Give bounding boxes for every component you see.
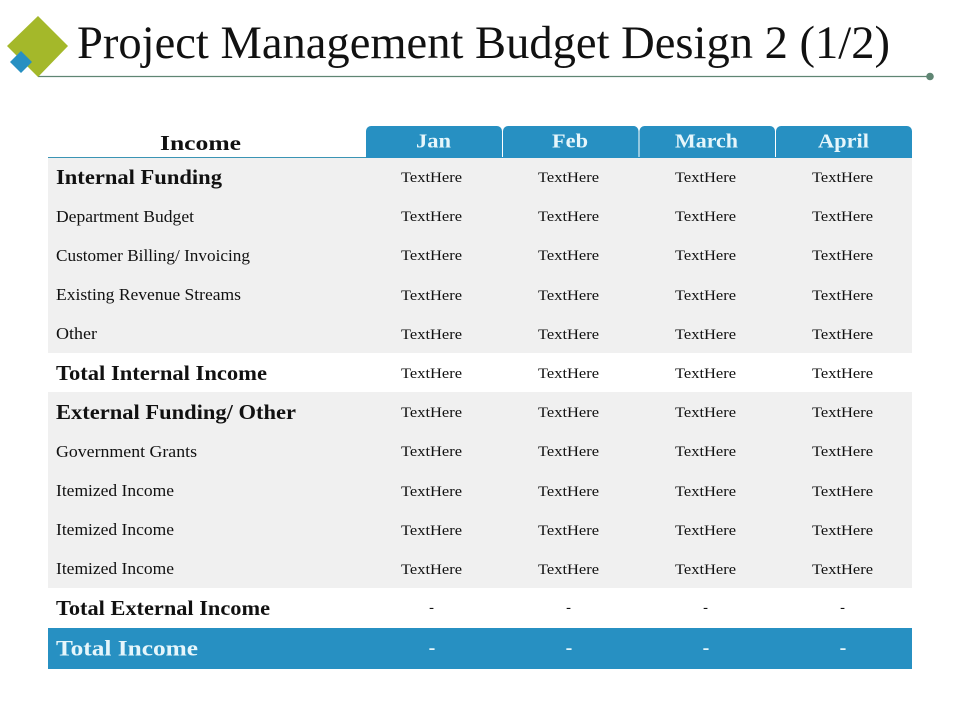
- row: Customer Billing/ Invoicing: TextHere: [675, 248, 736, 264]
- row: Other: [56, 324, 873, 343]
- row: Itemized Income 3: TextHere: [538, 562, 599, 578]
- row: Itemized Income 3: Itemized Income: [56, 559, 174, 578]
- row: External Funding/ Other: TextHere: [675, 405, 736, 421]
- row: Itemized Income 2: TextHere: [675, 523, 736, 539]
- row: Total Internal Income: TextHere: [401, 366, 462, 382]
- row: Internal Funding: TextHere: [401, 170, 462, 186]
- row: Existing Revenue Streams: TextHere: [675, 288, 736, 304]
- row: Total Internal Income: [56, 361, 873, 385]
- row: Customer Billing/ Invoicing: TextHere: [538, 248, 599, 264]
- title: Project Management Budget Design 2 (1/2): [77, 17, 890, 69]
- row: Total Income: -: [703, 637, 709, 659]
- row: Itemized Income 1: [56, 481, 873, 500]
- row: Other: TextHere: [812, 327, 873, 343]
- row: Itemized Income 1: TextHere: [812, 484, 873, 500]
- row: Other: TextHere: [401, 327, 462, 343]
- row: Total Income: -: [840, 637, 846, 659]
- row: Existing Revenue Streams: TextHere: [538, 288, 599, 304]
- panel: external funding background: [48, 392, 912, 588]
- row: Itemized Income 2: Itemized Income: [56, 520, 174, 539]
- row: Total Internal Income: Total Internal Income: [56, 361, 267, 385]
- row: Existing Revenue Streams: Existing Revenue Streams: [56, 285, 241, 304]
- row: Customer Billing/ Invoicing: TextHere: [401, 248, 462, 264]
- total income band: [48, 628, 912, 669]
- row: External Funding/ Other: TextHere: [538, 405, 599, 421]
- row: Total Internal Income: TextHere: [675, 366, 736, 382]
- row: Internal Funding: TextHere: [538, 170, 599, 186]
- row: Itemized Income 2: TextHere: [812, 523, 873, 539]
- row: External Funding/ Other: External Funding/ Other: [56, 400, 296, 424]
- row: Other: TextHere: [538, 327, 599, 343]
- row: External Funding/ Other: TextHere: [401, 405, 462, 421]
- row: Internal Funding: TextHere: [675, 170, 736, 186]
- row: Total Income: Total Income: [56, 636, 198, 660]
- row: Itemized Income 1: TextHere: [538, 484, 599, 500]
- row: Government Grants: TextHere: [812, 444, 873, 460]
- row: Customer Billing/ Invoicing: TextHere: [812, 248, 873, 264]
- row: Department Budget: TextHere: [675, 209, 736, 225]
- row: Government Grants: TextHere: [401, 444, 462, 460]
- row: Customer Billing/ Invoicing: [56, 246, 873, 265]
- row: Total Income: -: [566, 637, 572, 659]
- row: Itemized Income 3: TextHere: [675, 562, 736, 578]
- row: Total External Income: -: [429, 600, 434, 616]
- icon: green and blue diamonds: [7, 16, 68, 77]
- header rule with end dot: [38, 73, 934, 80]
- row: Department Budget: [56, 207, 873, 226]
- row: Department Budget: TextHere: [401, 209, 462, 225]
- row: Itemized Income 2: [56, 520, 873, 539]
- row: Itemized Income 1: TextHere: [401, 484, 462, 500]
- row: Department Budget: Department Budget: [56, 207, 194, 226]
- row: Internal Funding: TextHere: [812, 170, 873, 186]
- row: Itemized Income 1: TextHere: [675, 484, 736, 500]
- month header tabs: [366, 126, 912, 158]
- row: Itemized Income 3: [56, 559, 873, 578]
- row: Existing Revenue Streams: TextHere: [401, 288, 462, 304]
- row: Existing Revenue Streams: [56, 285, 873, 304]
- row: Total Income: [56, 636, 846, 660]
- row: Total External Income: [56, 596, 845, 620]
- month header tabs: Feb: [552, 130, 588, 152]
- row: Total Income: -: [429, 637, 435, 659]
- row: Itemized Income 2: TextHere: [401, 523, 462, 539]
- row: Total External Income: Total External Income: [56, 596, 270, 620]
- table heading: Income: Income: [160, 131, 241, 155]
- row: Other: Other: [56, 324, 98, 343]
- row: Government Grants: [56, 442, 873, 461]
- row: Internal Funding: [56, 165, 873, 189]
- row: External Funding/ Other: TextHere: [812, 405, 873, 421]
- month header tabs: March: [675, 130, 738, 152]
- row: Total External Income: -: [840, 600, 845, 616]
- row: Department Budget: TextHere: [538, 209, 599, 225]
- row: External Funding/ Other: [56, 400, 873, 424]
- row: Other: TextHere: [675, 327, 736, 343]
- row: Government Grants: TextHere: [538, 444, 599, 460]
- row: Customer Billing/ Invoicing: Customer Billing/ Invoicing: [56, 246, 250, 265]
- month header tabs: Jan: [416, 130, 451, 152]
- row: Internal Funding: Internal Funding: [56, 165, 223, 189]
- row: Total External Income: -: [703, 600, 708, 616]
- row: Total External Income: -: [566, 600, 571, 616]
- row: Itemized Income 1: Itemized Income: [56, 481, 174, 500]
- row: Itemized Income 3: TextHere: [401, 562, 462, 578]
- row: Total Internal Income: TextHere: [538, 366, 599, 382]
- panel: internal funding background: [48, 158, 912, 353]
- row: Itemized Income 2: TextHere: [538, 523, 599, 539]
- row: Existing Revenue Streams: TextHere: [812, 288, 873, 304]
- month header tabs: April: [818, 130, 869, 152]
- row: Total Internal Income: TextHere: [812, 366, 873, 382]
- row: Government Grants: Government Grants: [56, 442, 197, 461]
- row: Government Grants: TextHere: [675, 444, 736, 460]
- row: Itemized Income 3: TextHere: [812, 562, 873, 578]
- row: Department Budget: TextHere: [812, 209, 873, 225]
